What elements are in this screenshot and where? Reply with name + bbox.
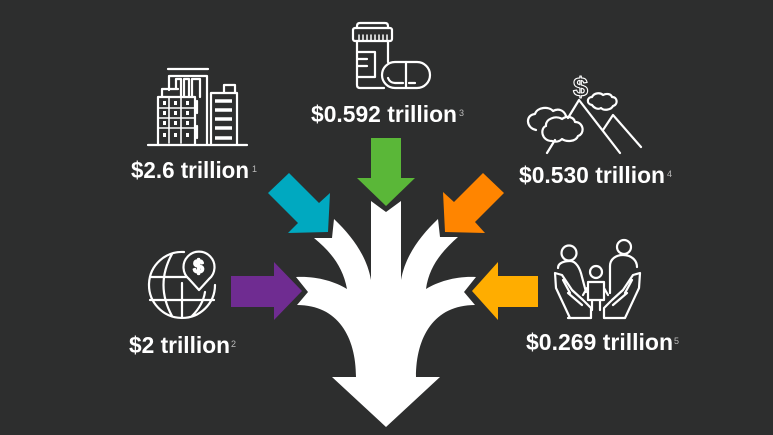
label: $0.592 trillion: $0.592 trillion <box>311 101 457 127</box>
label: $0.530 trillion: 4 <box>667 169 672 179</box>
icon: globe with dollar pin <box>149 252 215 318</box>
label: $0.269 trillion: $0.269 trillion <box>526 329 673 355</box>
icon: buildings <box>148 69 247 145</box>
icon: family in caring hands <box>555 240 640 318</box>
icon: mountains with dollar sign and clouds <box>528 72 641 153</box>
arrow: purple <box>231 262 302 320</box>
arrow: green <box>357 138 415 206</box>
arrow: yellow <box>472 262 538 320</box>
label: $2.6 trillion: $2.6 trillion <box>131 157 249 183</box>
icon: globe with dollar pin: $ <box>193 257 204 277</box>
label: $0.592 trillion: 3 <box>459 108 464 118</box>
arrow: teal <box>268 173 330 233</box>
label: $0.269 trillion: 5 <box>674 336 679 346</box>
central white branching arrow <box>296 201 476 427</box>
label: $2 trillion: $2 trillion <box>129 332 230 358</box>
label: $2 trillion: 2 <box>231 339 236 349</box>
icon: mountains with dollar sign and clouds: $ <box>573 72 588 102</box>
icon: pill bottle and capsule <box>353 23 430 88</box>
label: $0.530 trillion: $0.530 trillion <box>519 162 665 188</box>
arrow: orange <box>443 173 504 233</box>
label: $2.6 trillion: 1 <box>252 164 257 174</box>
